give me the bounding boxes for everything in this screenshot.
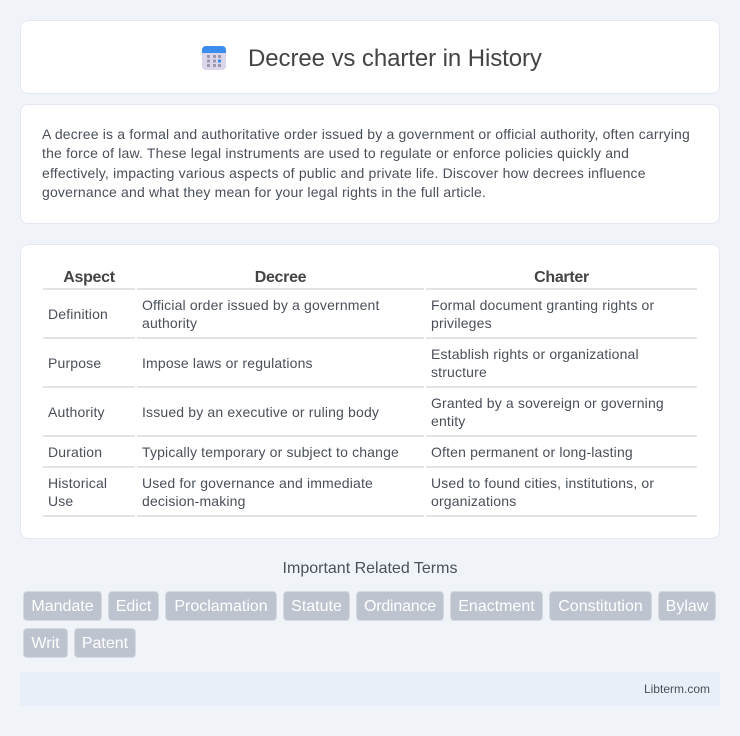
tag: Statute: Statute (291, 598, 342, 615)
tag: Bylaw (658, 591, 716, 621)
comparison table card: Granted by a sovereign or governing (431, 395, 664, 411)
tag: Bylaw: Bylaw (666, 598, 708, 615)
related terms heading: Important Related Terms (283, 560, 457, 577)
tag: Edict (108, 591, 159, 621)
tag: Mandate (23, 591, 102, 621)
row: Historical Use: Use (48, 493, 73, 509)
row: Definition: Definition (48, 306, 108, 322)
table header: Decree: Decree (255, 269, 306, 286)
tag: Mandate: Mandate (31, 598, 94, 615)
comparison table card: structure (431, 364, 487, 380)
tag: Enactment: Enactment (458, 598, 535, 615)
intro paragraph: effectively, impacting various aspects of public and private life. Discover how decrees influence (42, 165, 646, 181)
title: Decree vs charter in History (248, 45, 542, 72)
comparison table card: Official order issued by a government (142, 297, 380, 313)
comparison table card (20, 244, 720, 539)
table header: Charter: Charter (534, 269, 589, 286)
tag: Writ: Writ (31, 635, 60, 652)
tag: Proclamation: Proclamation (174, 598, 268, 615)
tag: Ordinance (356, 591, 444, 621)
intro paragraph: the force of law. These legal instruments are used to regulate or enforce policies quickly and (42, 145, 629, 161)
intro text card (20, 104, 720, 224)
row: Purpose: Purpose (48, 355, 101, 371)
footer bar (20, 672, 720, 706)
comparison table card: decision-making (142, 493, 246, 509)
tag: Edict: Edict (116, 598, 151, 615)
tag: Enactment (450, 591, 543, 621)
comparison table card: entity (431, 413, 465, 429)
tag: Constitution (549, 591, 652, 621)
comparison table card: Typically temporary or subject to change (142, 444, 399, 460)
header card (20, 20, 720, 94)
table header: Aspect: Aspect (63, 269, 115, 286)
footer credit: Libterm.com (644, 682, 710, 696)
intro paragraph: governance and what they mean for your legal rights in the full article. (42, 184, 486, 200)
row: Authority: Authority (48, 404, 105, 420)
tag: Constitution: Constitution (558, 598, 643, 615)
intro paragraph (42, 126, 690, 200)
comparison table card: Formal document granting rights or (431, 297, 654, 313)
comparison table card: authority (142, 315, 197, 331)
comparison table card: privileges (431, 315, 492, 331)
tag: Patent: Patent (82, 635, 128, 652)
tag: Proclamation (165, 591, 277, 621)
comparison table card: Used to found cities, institutions, or (431, 475, 654, 491)
tag: Patent (74, 628, 136, 658)
comparison table card: organizations (431, 493, 516, 509)
comparison table card: Establish rights or organizational (431, 346, 639, 362)
tag: Statute (283, 591, 350, 621)
comparison table card: Often permanent or long-lasting (431, 444, 633, 460)
intro paragraph: A decree is a formal and authoritative order issued by a government or official authority, often carrying (42, 126, 690, 142)
row: Historical Use: Historical (48, 475, 107, 491)
related term tags (23, 591, 716, 658)
comparison table card: Issued by an executive or ruling body (142, 404, 379, 420)
row: Historical Use (48, 475, 107, 509)
tag: Writ (23, 628, 68, 658)
tag: Ordinance: Ordinance (364, 598, 436, 615)
comparison table card: Used for governance and immediate (142, 475, 373, 491)
icon: calendar (202, 46, 226, 70)
row: Duration: Duration (48, 444, 102, 460)
comparison table card: Impose laws or regulations (142, 355, 313, 371)
